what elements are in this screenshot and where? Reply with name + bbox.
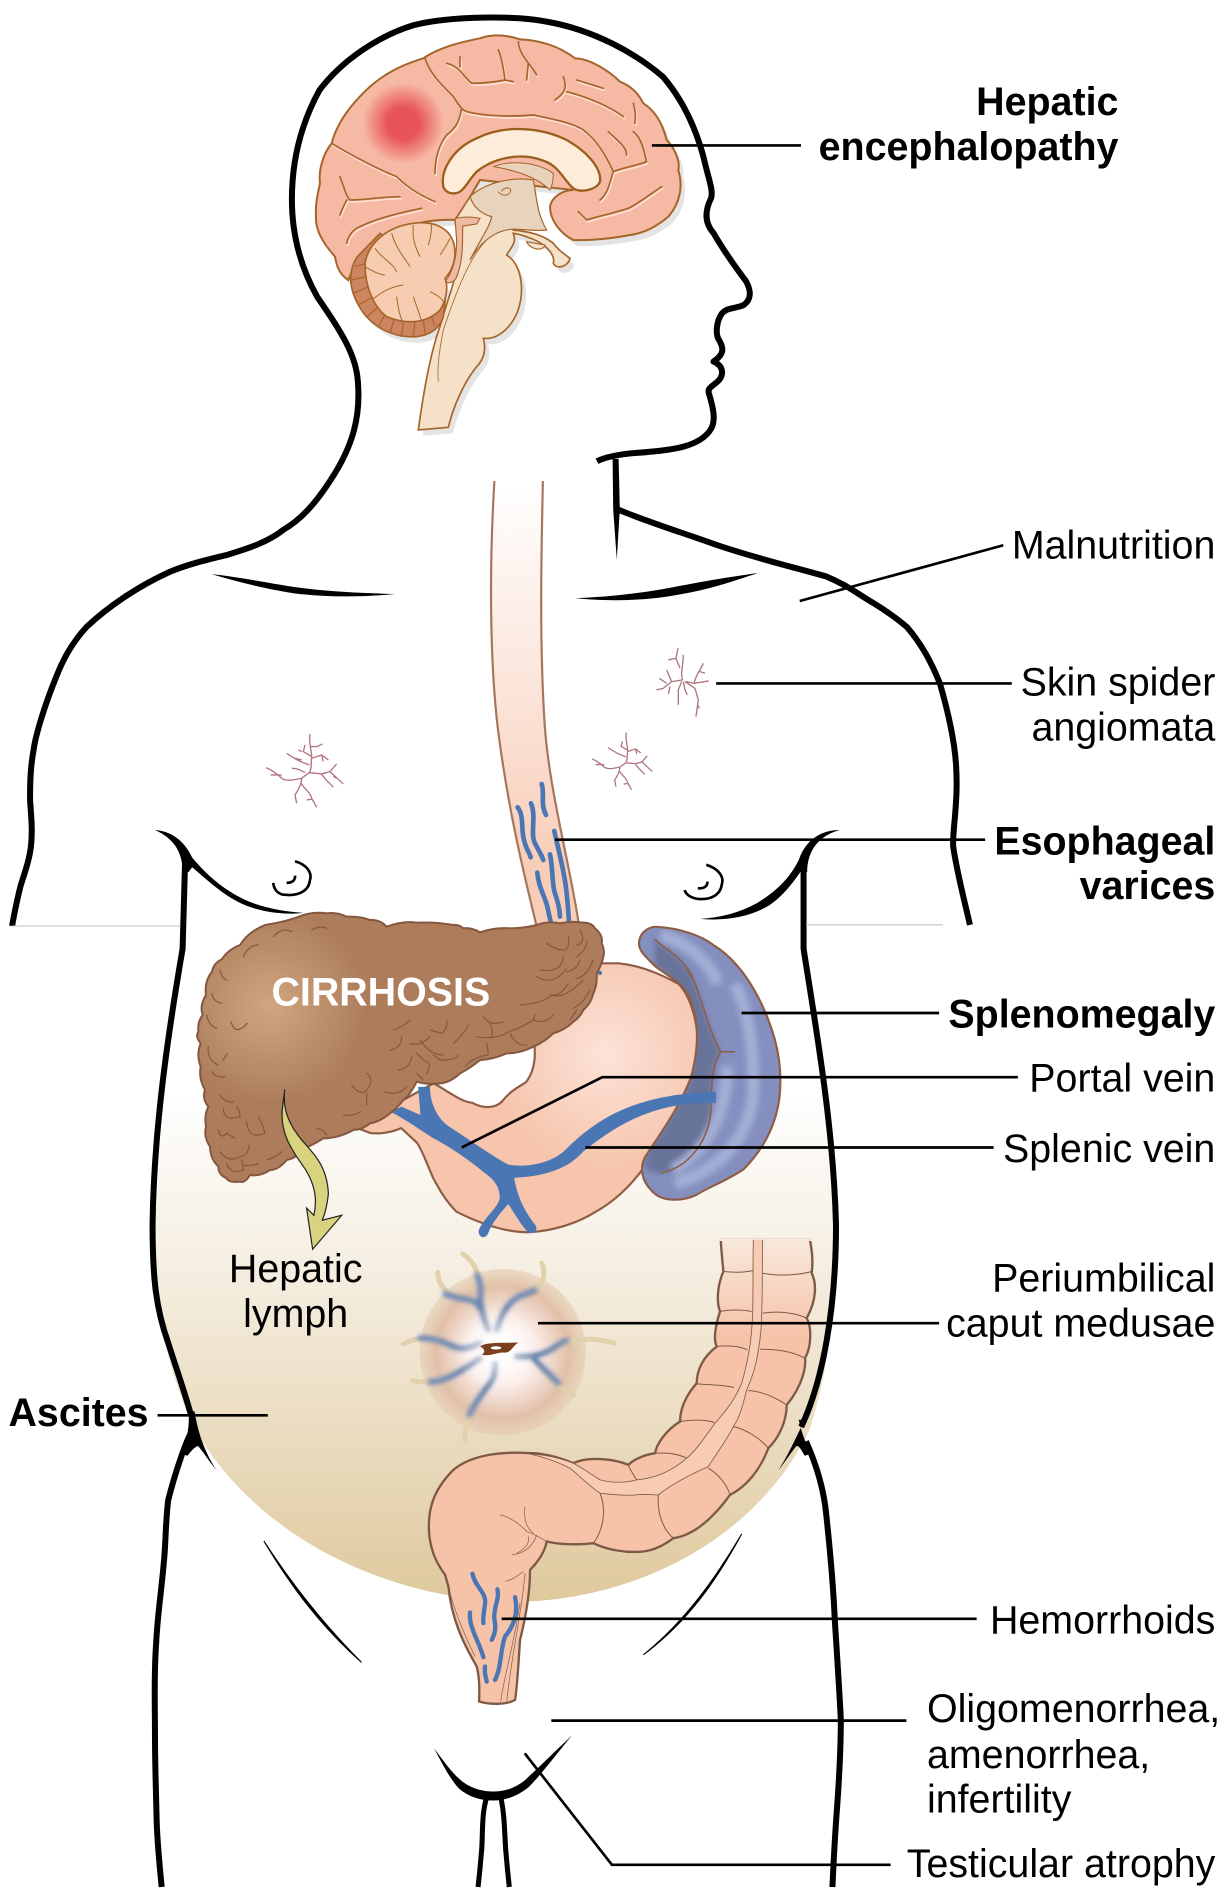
label: oligomenorrhea, amenorrhea, infertility: amenorrhea,	[927, 1733, 1150, 1777]
right nipple	[685, 865, 722, 899]
left nipple	[273, 861, 311, 895]
label: oligomenorrhea, amenorrhea, infertility: Oligomenorrhea,	[927, 1687, 1220, 1731]
spleen body	[639, 927, 780, 1200]
label: hepatic encephalopathy: encephalopathy	[819, 125, 1119, 169]
left lobe nodules	[207, 927, 430, 1171]
left waist junction	[180, 1411, 217, 1471]
label: hepatic lymph	[229, 1247, 362, 1336]
neck spike	[613, 459, 620, 560]
leader: esophageal varices	[555, 839, 985, 841]
right breast fold	[700, 830, 840, 919]
spleen dark inner band	[645, 939, 721, 1173]
inner legs	[478, 1798, 509, 1887]
portal and splenic veins	[390, 1087, 716, 1237]
digestive organs	[354, 927, 780, 1237]
left clavicle	[211, 574, 395, 596]
brain shadow	[320, 41, 685, 436]
label: splenomegaly: Splenomegaly	[948, 993, 1215, 1037]
spider angioma right upper	[657, 648, 709, 717]
colon silhouette	[429, 1240, 815, 1704]
stomach	[354, 963, 698, 1232]
periumbilical skin	[419, 1269, 586, 1436]
label: malnutrition: Malnutrition	[1012, 524, 1215, 568]
hepatic lymph arrow	[282, 1089, 342, 1249]
label: esophageal varices: Esophageal	[994, 819, 1215, 863]
label: testicular atrophy: Testicular atrophy	[907, 1842, 1216, 1886]
spider angioma left	[266, 734, 343, 807]
label: portal vein: Portal vein	[1029, 1057, 1215, 1101]
cerebellum folia ridges	[352, 263, 435, 337]
leader: hemorrhoids	[502, 1618, 977, 1620]
label: skin spider angiomata: angiomata	[1031, 705, 1215, 749]
left shoulder and arm	[12, 480, 330, 926]
pituitary bulb	[527, 242, 545, 249]
right lobe nodules	[417, 930, 593, 1073]
central fade	[453, 1307, 537, 1390]
leader: hepatic encephalopathy	[652, 144, 801, 147]
leader: ascites	[158, 1414, 268, 1416]
spleen inner folds	[655, 939, 735, 1173]
leader: skin spider angiomata	[716, 682, 1012, 685]
fornix	[494, 163, 553, 190]
left breast fold	[155, 830, 303, 914]
left leg edge	[155, 1435, 190, 1887]
spleen outline	[639, 927, 780, 1200]
label: oligomenorrhea, amenorrhea, infertility: infertility	[927, 1778, 1072, 1822]
leader: malnutrition	[800, 545, 1003, 601]
corpus callosum	[443, 129, 600, 193]
taenia band	[530, 1240, 763, 1495]
pineal detail	[498, 188, 511, 195]
right leg edge	[806, 1441, 841, 1887]
label: esophageal varices	[994, 819, 1215, 908]
spider angioma right lower	[592, 733, 652, 790]
label: oligomenorrhea, amenorrhea, infertility	[927, 1687, 1220, 1822]
pink wedge	[445, 217, 480, 283]
esophagus	[491, 481, 579, 927]
leader: splenomegaly	[742, 1012, 939, 1014]
blue dilated veins	[420, 1275, 567, 1415]
sulci highlight	[333, 44, 663, 245]
thalamus	[470, 179, 547, 260]
cerebellum branches	[365, 223, 450, 323]
label: periumbilical caput medusae: caput medusae	[946, 1302, 1215, 1346]
colon	[429, 1240, 815, 1704]
chest edge lines	[12, 925, 943, 926]
label: periumbilical caput medusae	[946, 1257, 1215, 1346]
liver body	[197, 913, 604, 1182]
left groin line	[264, 1541, 362, 1662]
spleen	[639, 927, 780, 1200]
hemorrhoid veins	[470, 1574, 516, 1682]
right waist junction	[778, 1420, 812, 1470]
ascites fluid	[154, 1066, 835, 1602]
blue dot on stomach	[598, 971, 602, 975]
esophageal varices veins	[518, 784, 569, 925]
label: splenic vein: Splenic vein	[1003, 1127, 1215, 1171]
label: hepatic lymph: lymph	[243, 1292, 348, 1336]
liver	[197, 913, 604, 1182]
leader: testicular atrophy	[525, 1753, 891, 1865]
tan vein ends	[403, 1254, 614, 1440]
cerebellum outer band	[351, 233, 447, 337]
label: hepatic encephalopathy: Hepatic	[976, 80, 1118, 124]
leader: caput medusae	[538, 1322, 939, 1324]
label: skin spider angiomata: Skin spider	[1021, 661, 1215, 705]
label: hemorrhoids: Hemorrhoids	[990, 1598, 1215, 1642]
cerebellum core	[365, 223, 455, 322]
brainstem	[418, 197, 570, 430]
caput medusae	[403, 1254, 614, 1440]
leader: splenic vein	[585, 1146, 994, 1149]
esophagus tube	[491, 481, 579, 927]
head and face outline	[292, 17, 750, 480]
cerebrum	[316, 35, 681, 280]
spleen highlight	[661, 935, 753, 1184]
right clavicle	[575, 573, 758, 600]
umbilicus	[480, 1343, 518, 1355]
label: ascites: Ascites	[8, 1391, 149, 1435]
hot spot lesion	[363, 83, 444, 164]
left torso edge	[153, 865, 191, 1415]
label: hepatic encephalopathy	[819, 80, 1119, 169]
umbilicus centre	[491, 1346, 501, 1350]
label: periumbilical caput medusae: Periumbilical	[992, 1257, 1215, 1301]
label: esophageal varices: varices	[1080, 864, 1215, 908]
brain	[316, 35, 685, 436]
brainstem inner channel	[438, 240, 487, 382]
sulci	[332, 42, 662, 243]
CIRRHOSIS label: CIRRHOSIS	[271, 971, 490, 1015]
label: hepatic lymph: Hepatic	[229, 1247, 362, 1291]
right torso edge	[801, 865, 836, 1427]
right groin line	[643, 1534, 742, 1655]
right shoulder and arm	[617, 509, 970, 925]
haustra folds	[593, 1271, 812, 1543]
top edge cover	[718, 1236, 812, 1243]
leader: oligomenorrhea	[551, 1720, 906, 1722]
body outline	[12, 17, 970, 1887]
spleen shading	[645, 935, 753, 1184]
label: skin spider angiomata	[1021, 661, 1215, 749]
rectal folds	[448, 1507, 547, 1702]
crotch	[434, 1736, 572, 1801]
leader: portal vein	[462, 1077, 1018, 1147]
